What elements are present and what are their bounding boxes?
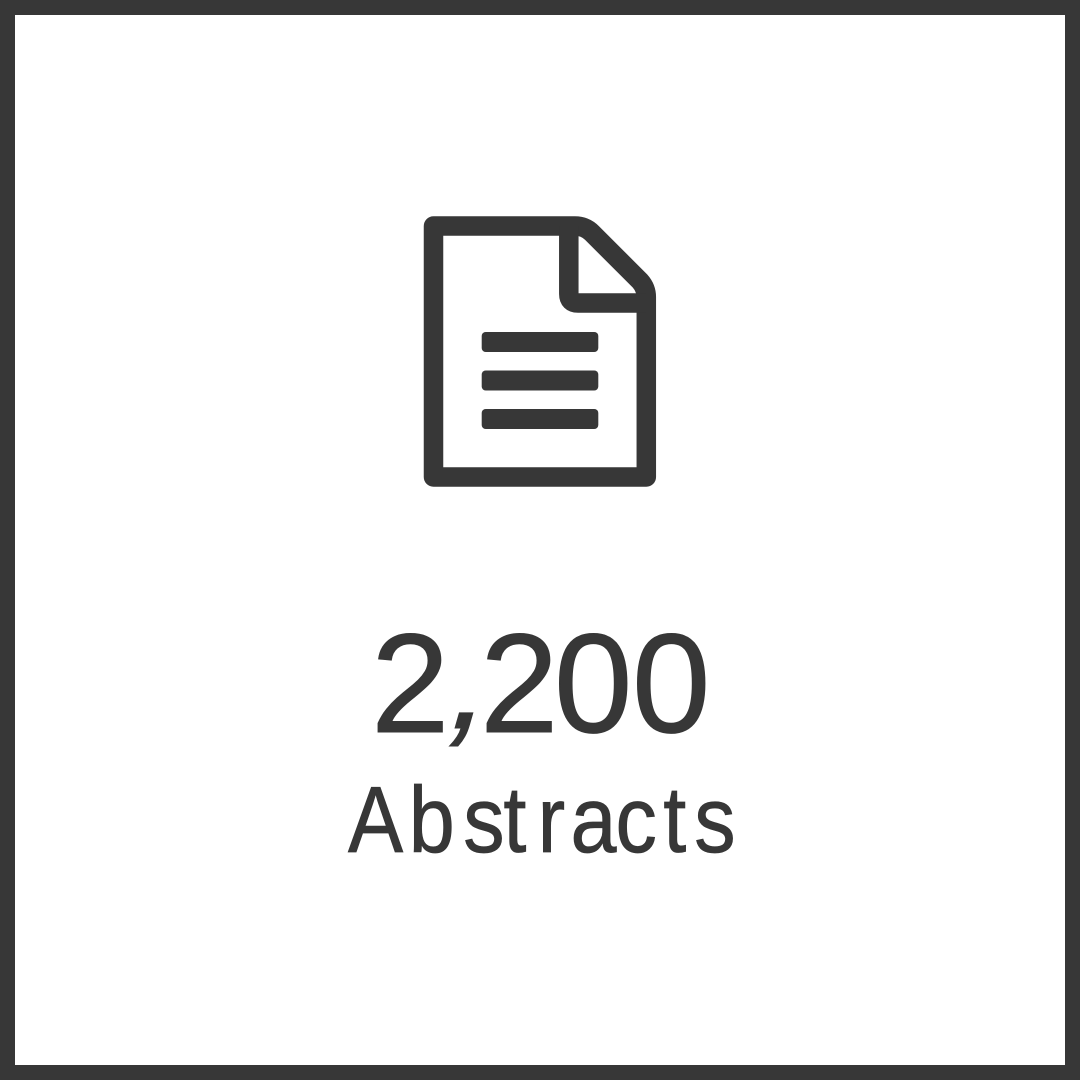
statistic: 2,200: 2200: [371, 604, 710, 762]
label: Abstracts: Abstracts: [348, 767, 736, 872]
statistic: 2,200: ,: [433, 602, 517, 758]
icon: document: [434, 226, 646, 477]
